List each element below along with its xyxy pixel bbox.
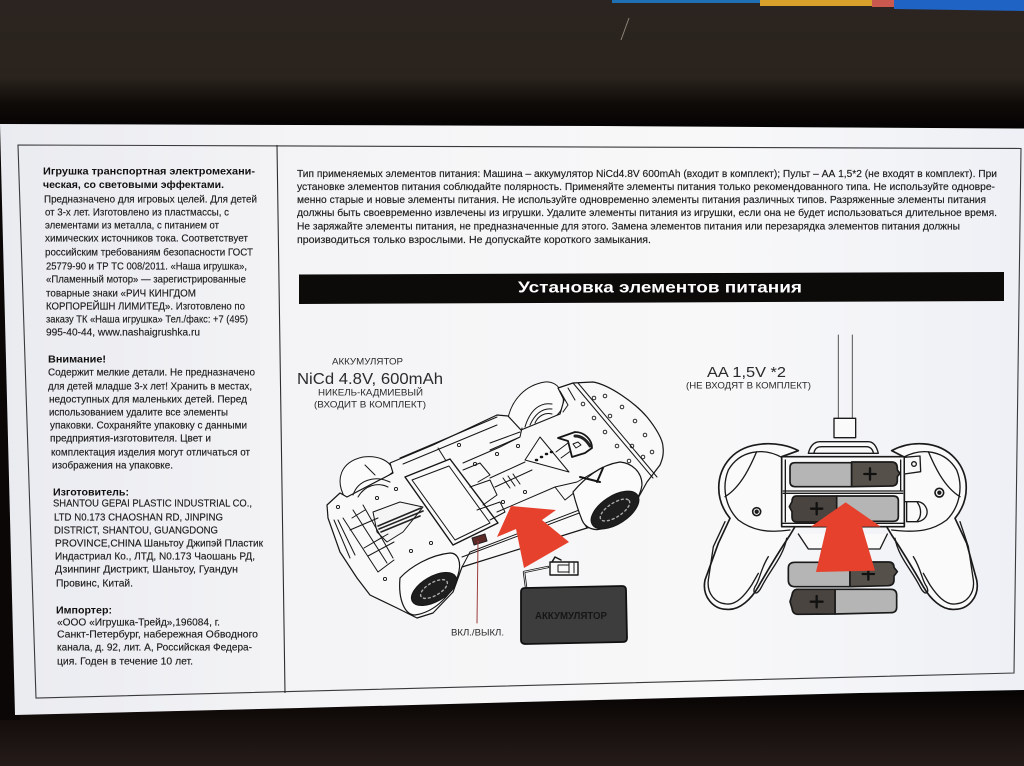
text block: product description bbox=[43, 166, 257, 338]
rear tire, upper bbox=[508, 382, 563, 434]
text block: battery instructions bbox=[297, 169, 997, 246]
battery pack: АККУМУЛЯТОР bbox=[535, 611, 608, 622]
battery pack bbox=[521, 586, 627, 644]
text block: battery instructions: производиться только взрослыми. Не допускайте короткого замыкания. bbox=[297, 235, 651, 246]
text block: product description: от 3-х лет. Изготовлено из пластмассы, с bbox=[45, 206, 229, 218]
car body outline bbox=[327, 382, 663, 618]
text block: manufacturer: DISTRICT, SHANTOU, GUANGDONG bbox=[54, 524, 218, 536]
front tire, upper bbox=[340, 457, 393, 502]
panel: white instruction sheet bbox=[0, 124, 1024, 715]
labels: remote battery specification bbox=[686, 364, 811, 392]
text block: warning: недоступных для маленьких детей. Перед bbox=[49, 394, 247, 406]
text block: product description: товарные знаки «РИЧ КИНГДОМ bbox=[46, 288, 196, 300]
text block: battery instructions: Тип применяемых элементов питания: Машина – аккумулятор NiCd4.8V 600mAh (входит в комплект); Пульт – АА 1,5*2 (не входят в комплект). При bbox=[297, 169, 997, 180]
text block: warning: использованием удалите все элементы bbox=[49, 406, 228, 418]
red arrow: insert batteries bbox=[811, 502, 881, 572]
text block: battery instructions: Не заряжайте элементы питания, не предназначенные для этого. Замена элементов питания или перезарядка элементов питания должны bbox=[297, 222, 960, 232]
text block: manufacturer: Провинс, Китай. bbox=[56, 578, 133, 590]
text block: importer bbox=[56, 604, 258, 668]
text block: warning: Содержит мелкие детали. Не предназначено bbox=[48, 366, 255, 378]
text block: battery instructions: должны быть своевременно извлечены из игрушки. Удалите элементы питания из игрушки, если она не будет использоваться длительное время. bbox=[297, 207, 997, 219]
text block: manufacturer: SHANTOU GEPAI PLASTIC INDUSTRIAL CO., bbox=[53, 498, 252, 510]
text block: importer: ция. Годен в течение 10 лет. bbox=[57, 656, 193, 668]
chassis rails bbox=[400, 383, 657, 567]
screws bbox=[753, 488, 944, 516]
text block: product description: 995-40-44, www.nashaigrushka.ru bbox=[46, 326, 200, 338]
compartment inner rails bbox=[782, 460, 907, 523]
left grip bbox=[704, 444, 798, 609]
text block: product description: «Пламенный мотор» — зарегистрированные bbox=[46, 274, 246, 286]
text block: warning: комплектация изделия могут отличаться от bbox=[51, 446, 250, 458]
text block: manufacturer bbox=[53, 486, 263, 590]
installed battery 2 bbox=[789, 496, 898, 522]
labels: remote battery specification: AA 1,5V *2 bbox=[707, 364, 786, 381]
text block: manufacturer: Изготовитель: bbox=[53, 486, 129, 498]
labels: car battery specification: (ВХОДИТ В КОМПЛЕКТ) bbox=[314, 400, 426, 410]
heading bar: battery installation: Установка элементов питания bbox=[518, 280, 802, 296]
text block: warning: упаковки. Сохраняйте упаковку с данными bbox=[50, 420, 247, 432]
antenna bbox=[808, 335, 878, 453]
text block: importer: канала, д. 92, лит. А, Российская Федера- bbox=[57, 642, 252, 654]
label: on/off switch: ВКЛ./ВЫКЛ. bbox=[451, 628, 504, 638]
text block: product description: Игрушка транспортная электромехани- bbox=[43, 166, 256, 178]
labels: car battery specification: NiCd 4.8V, 600mAh bbox=[297, 371, 443, 388]
text block: battery instructions: менно старые и новые элементы питания. Не используйте одновременно элементы питания различных типов. Разряженные элементы питания bbox=[297, 195, 986, 206]
compartment side tabs bbox=[904, 456, 927, 522]
front section details bbox=[334, 465, 423, 572]
illustration: remote control bbox=[704, 335, 977, 614]
text block: product description: элементами из металла, с питанием от bbox=[45, 220, 219, 232]
text block: product description: заказу ТК «Наша игрушка» Тел./факс: +7 (495) bbox=[46, 314, 248, 326]
chassis screw holes bbox=[336, 394, 654, 581]
wheel hubs, upper bbox=[353, 388, 575, 497]
text block: product description: 25779-90 и ТР ТС 008/2011. «Наша игрушка», bbox=[46, 260, 247, 272]
red arrow: insert battery bbox=[497, 506, 569, 568]
text block: importer: Импортер: bbox=[56, 604, 112, 616]
text block: warning: предприятия-изготовителя. Цвет и bbox=[50, 432, 211, 444]
labels: car battery specification bbox=[297, 356, 443, 410]
text block: warning: Внимание! bbox=[48, 354, 106, 366]
text block: product description: Предназначено для игровых целей. Для детей bbox=[44, 194, 257, 206]
text block: product description: ческая, со световыми эффектами. bbox=[43, 179, 224, 191]
battery connector and wire bbox=[524, 557, 578, 587]
labels: car battery specification: НИКЕЛЬ-КАДМИЕВЫЙ bbox=[318, 386, 423, 398]
text block: warning bbox=[48, 354, 255, 472]
text block: battery instructions: установке элементов питания соблюдайте полярность. Применяйте элементы питания только рекомендованного типа. Не используйте одновре- bbox=[297, 181, 995, 193]
labels: car battery specification: АККУМУЛЯТОР bbox=[332, 356, 403, 368]
rear wheel, lower bbox=[573, 462, 645, 536]
drive shaft and motor bbox=[463, 432, 592, 520]
loose battery 4 bbox=[790, 589, 897, 614]
illustration: car underside bbox=[327, 382, 663, 644]
battery cover bbox=[405, 459, 498, 545]
text block: manufacturer: LTD N0.173 CHAOSHAN RD, JINPING bbox=[54, 512, 223, 524]
text block: manufacturer: PROVINCE,CHINA Шаньтоу Джипэй Пластик bbox=[55, 538, 263, 550]
switch pointer line bbox=[477, 541, 478, 623]
labels: remote battery specification: (НЕ ВХОДЯТ В КОМПЛЕКТ) bbox=[686, 380, 811, 392]
text block: importer: «ООО «Игрушка-Трейд»,196084, г. bbox=[57, 616, 220, 628]
heading bar: battery installation bbox=[299, 272, 1004, 304]
text block: product description: химических источников тока. Соответствует bbox=[45, 232, 248, 244]
text block: manufacturer: Дзинпинг Дистрикт, Шаньтоу, Гуандун bbox=[55, 564, 238, 576]
text block: product description: КОРПОРЕЙШН ЛИМИТЕД». Изготовлено по bbox=[46, 300, 245, 312]
text block: warning: для детей младше 3-х лет! Хранить в местах, bbox=[48, 380, 252, 392]
installed battery 1 bbox=[790, 462, 900, 487]
right grip bbox=[887, 444, 977, 609]
battery compartment bbox=[782, 457, 904, 527]
front wheel, lower bbox=[400, 553, 462, 615]
lower center bump bbox=[798, 534, 887, 549]
on/off switch bbox=[472, 534, 487, 545]
loose battery 3 bbox=[788, 562, 897, 587]
text block: product description: российским требованиям безопасности ГОСТ bbox=[45, 246, 254, 258]
text block: importer: Санкт-Петербург, набережная Обводного bbox=[57, 628, 258, 640]
text block: manufacturer: Индастриал Ко., ЛТД, N0.173 Чаошань РД, bbox=[55, 550, 255, 562]
text block: warning: изображения на упаковке. bbox=[52, 460, 173, 472]
